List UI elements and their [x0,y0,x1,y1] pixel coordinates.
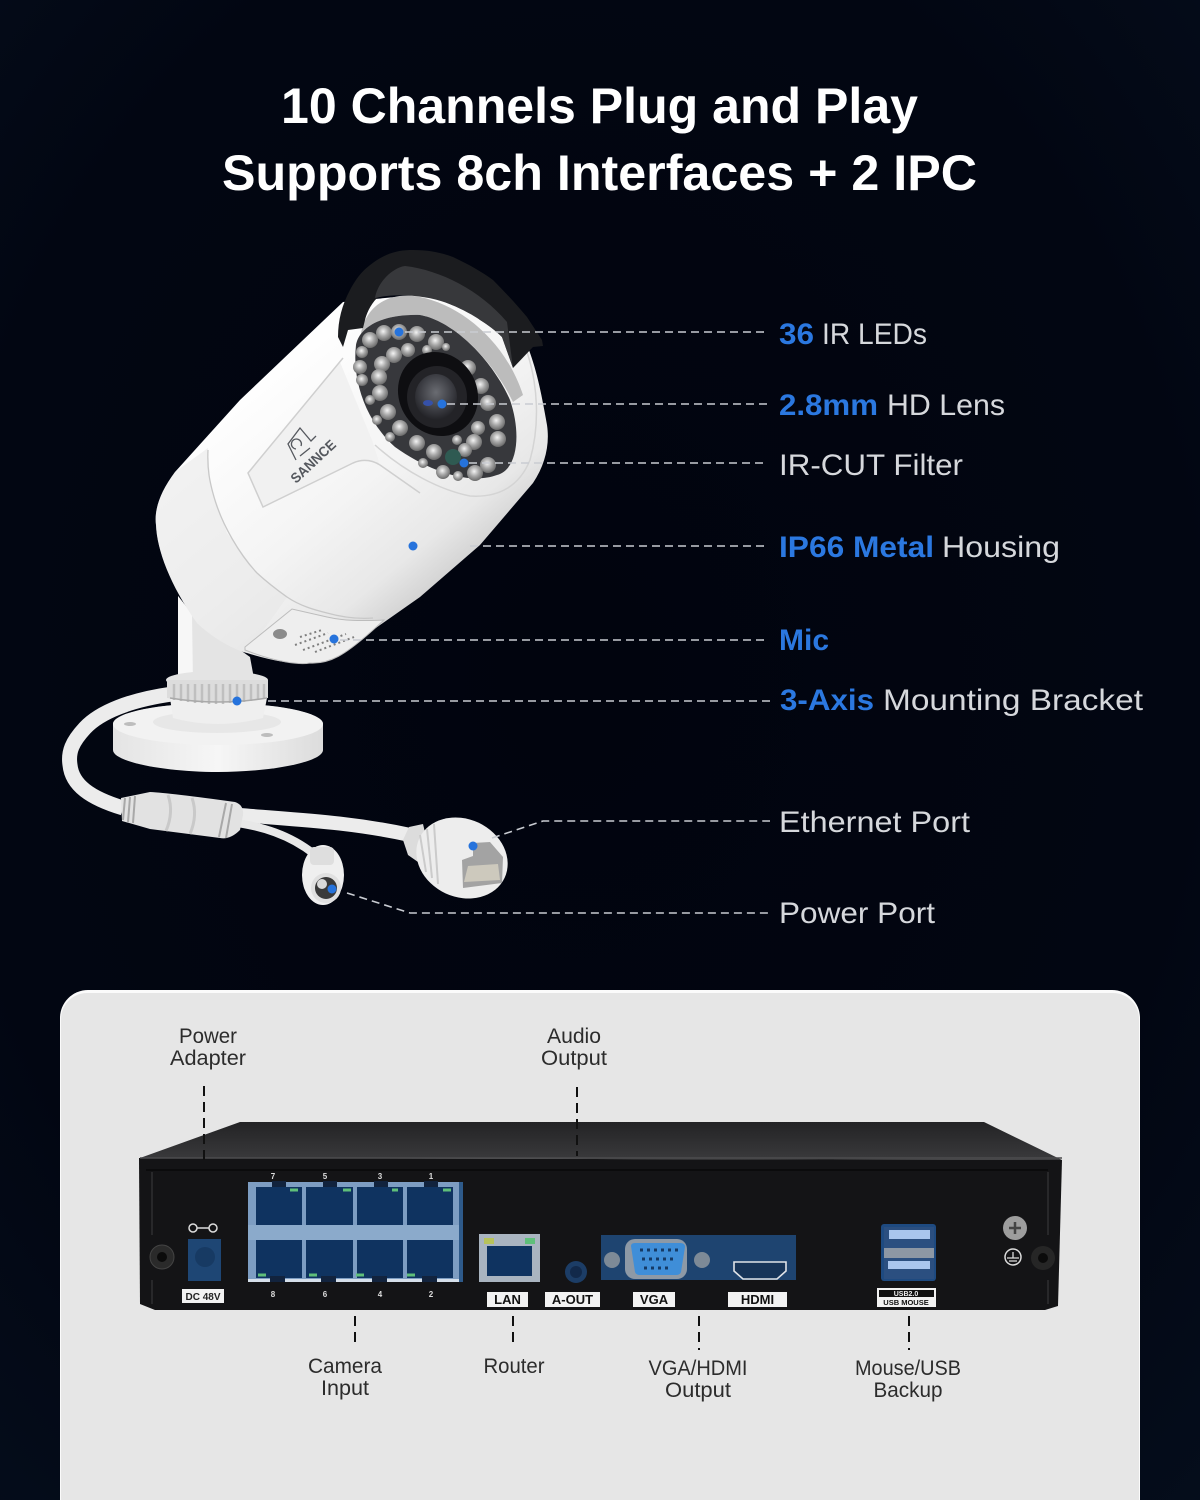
label: Audio Output: Output [541,1047,607,1070]
label: Power Port: Power Port [779,897,936,930]
tag: HDMI: HDMI [741,1292,774,1307]
port numbers: 2 [429,1290,434,1299]
lens [383,337,493,451]
label: 36 IR LEDs: IR LEDs [822,318,927,351]
tag: A-OUT: A-OUT [552,1292,593,1307]
label: 2.8mm HD Lens: HD Lens [887,389,1005,422]
port numbers: 7 [271,1172,276,1181]
label: VGA/HDMI Output [648,1357,748,1402]
top face [140,1122,1062,1160]
title: Supports 8ch Interfaces + 2 IPC [222,145,977,201]
logo plate: SANNCE [287,436,339,486]
front ring seam [375,352,536,496]
tag: LAN: LAN [494,1292,521,1307]
tag: VGA: VGA [640,1292,669,1307]
bracket collar [166,671,268,724]
mic panel [245,609,384,664]
label: IP66 Metal Housing [779,531,1060,564]
audio jack [565,1261,587,1283]
panel: NVR rear ports [60,990,1140,1500]
label: IP66 Metal Housing: IP66 Metal [779,531,934,564]
label: Camera Input: Input [321,1377,369,1400]
port numbers: 5 [323,1172,328,1181]
VGA and HDMI ports [601,1235,796,1280]
label: 3-Axis Mounting Bracket: 3-Axis [780,684,874,717]
label: Camera Input: Camera [308,1355,382,1378]
label: 36 IR LEDs: 36 [779,318,814,351]
camera input ports [248,1182,463,1282]
hood inner surface [375,266,513,368]
power connector [302,845,344,905]
label: Audio Output: Audio [547,1025,601,1048]
tag: HDMI [728,1292,787,1307]
camera housing [156,290,548,664]
LAN port [479,1234,540,1282]
tag: DC 48V: DC 48V [185,1292,221,1303]
label: Mouse/USB Backup: Backup [874,1379,942,1402]
rear shading [156,448,287,653]
label: Audio Output [541,1025,607,1070]
port numbers: 8 [271,1290,276,1299]
port numbers: 1 [429,1172,434,1181]
label: Mouse/USB Backup: Mouse/USB [855,1357,961,1380]
label: 36 IR LEDs [779,318,927,351]
label: 2.8mm HD Lens [779,389,1005,422]
label: Mouse/USB Backup [855,1357,961,1402]
port numbers: 3 [378,1172,383,1181]
front face [139,1158,1062,1310]
label: VGA/HDMI Output: VGA/HDMI [648,1357,748,1380]
IR-CUT filter [445,449,461,465]
tag: USB: USB2.0 [894,1291,918,1298]
tag: USB [877,1288,936,1307]
label: Power Adapter [170,1025,246,1070]
bullet camera illustration [70,250,548,913]
port numbers: 6 [323,1290,328,1299]
label: 2.8mm HD Lens: 2.8mm [779,389,878,422]
title [222,78,977,201]
port numbers: 4 [378,1290,383,1299]
screws and ground symbol [150,1216,1055,1270]
USB ports [881,1224,936,1281]
NVR recorder [139,1122,1062,1310]
label: Mic: Mic [779,624,829,657]
LED ring [353,324,506,481]
label: Ethernet Port: Ethernet Port [779,806,971,839]
logo plate [248,358,420,507]
mounting arm [178,596,255,684]
tag: DC 48V [182,1289,224,1303]
label: 3-Axis Mounting Bracket: Mounting Bracket [883,684,1144,717]
label: Router: Router [484,1355,545,1378]
ethernet connector [403,803,521,913]
tag: USB: USB MOUSE [883,1298,929,1307]
rear seam [208,450,373,618]
callout dots [232,328,478,894]
label: Power Adapter: Adapter [170,1047,246,1070]
label: IP66 Metal Housing: Housing [942,531,1060,564]
mounting base [113,703,323,772]
callout lines [268,332,770,913]
tag: LAN [487,1292,528,1307]
power jack [188,1224,221,1281]
label: 3-Axis Mounting Bracket [780,684,1144,717]
cable and connectors [70,694,521,913]
tag: VGA [633,1292,675,1307]
hood interior crescent [356,296,523,402]
hood [338,250,543,368]
port numbers [271,1172,434,1299]
dark lens face [355,315,516,478]
label: VGA/HDMI Output: Output [665,1379,731,1402]
title: 10 Channels Plug and Play [281,78,918,134]
label: Power Adapter: Power [179,1025,237,1048]
label: IR-CUT Filter: IR-CUT Filter [779,449,963,482]
callout dashes [204,1086,909,1350]
label: Camera Input [308,1355,382,1400]
